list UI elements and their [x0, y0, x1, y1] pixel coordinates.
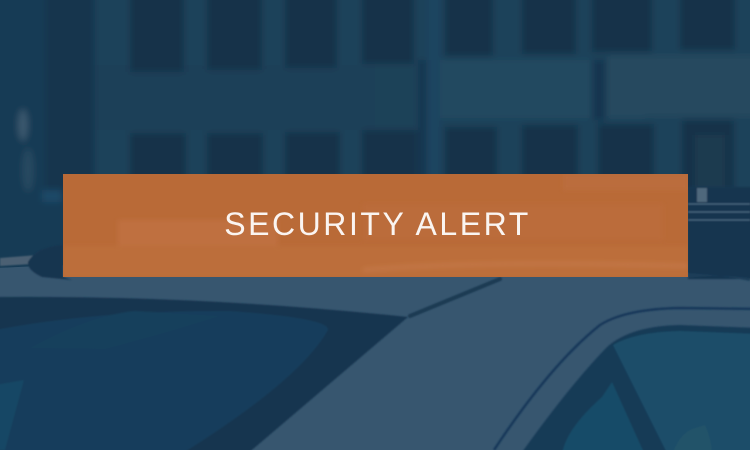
side mirror — [0, 245, 72, 280]
blurred building facade — [0, 0, 750, 290]
roof rail — [410, 279, 500, 316]
upper windows — [130, 0, 735, 72]
lower windows — [130, 120, 734, 193]
dark vertical column — [429, 0, 439, 190]
rear window — [0, 297, 408, 450]
car roof — [0, 262, 750, 450]
front door and windscreen — [494, 308, 750, 450]
traffic light — [46, 0, 94, 200]
orange banner — [63, 174, 688, 277]
police light bar — [688, 187, 750, 281]
title: SECURITY ALERT — [224, 206, 531, 242]
banner background — [63, 174, 688, 277]
